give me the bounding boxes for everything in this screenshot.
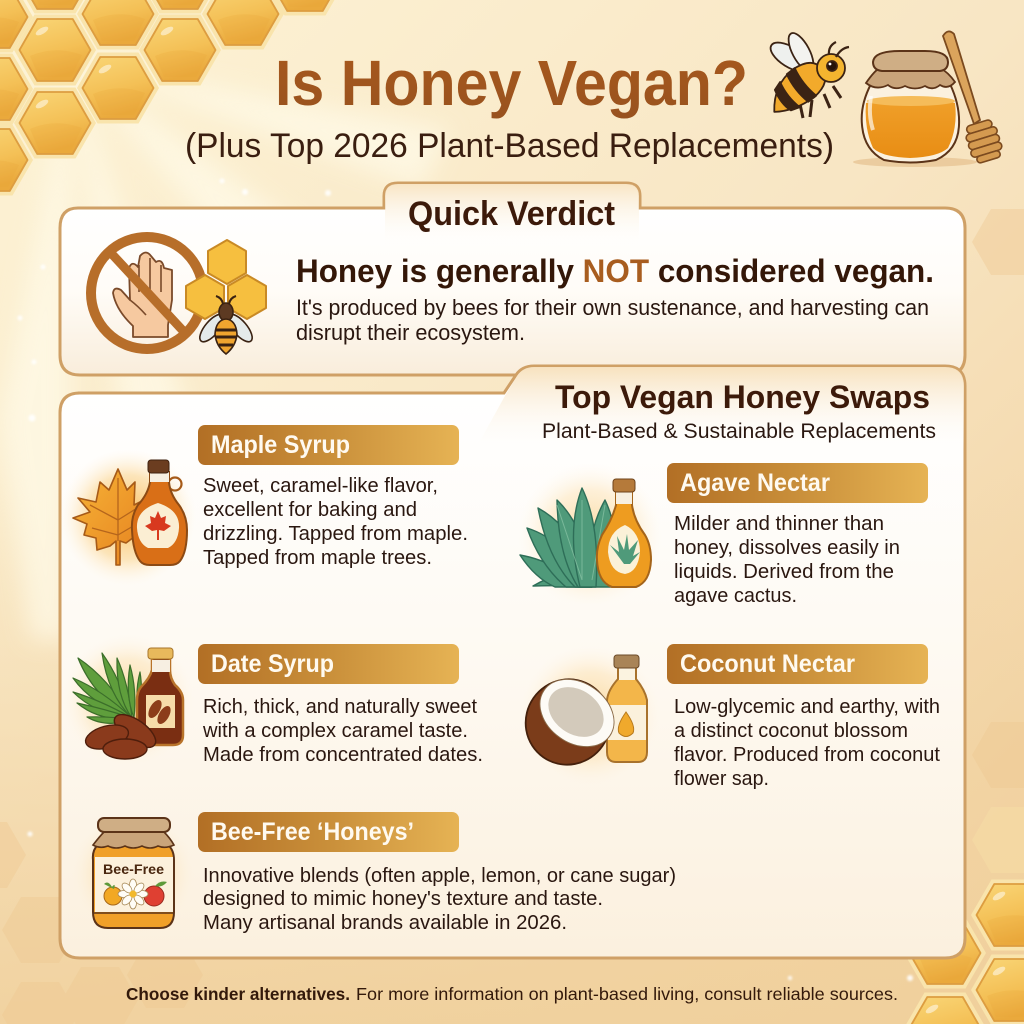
icon: honeycomb and bee — [186, 240, 266, 354]
heading: quick verdict: Quick Verdict — [408, 195, 615, 233]
footer: For more information on plant-based living, consult reliable sources. — [356, 984, 898, 1004]
label: date syrup — [198, 644, 459, 684]
text: maple syrup: Tapped from maple trees. — [203, 546, 432, 569]
title: Is Honey Vegan? — [275, 47, 748, 119]
text: agave nectar: honey, dissolves easily in — [674, 536, 900, 559]
label: coconut nectar — [667, 644, 928, 684]
item: maple syrup — [60, 425, 468, 585]
honeycomb: bottom-right — [904, 880, 1024, 1024]
item: bee-free honeys — [71, 811, 676, 935]
text: agave nectar — [674, 512, 900, 607]
item: coconut nectar — [509, 644, 940, 790]
text: maple syrup: drizzling. Tapped from maple. — [203, 522, 468, 545]
subtitle: (Plus Top 2026 Plant-Based Replacements) — [185, 127, 834, 165]
icon: coconut and bottle — [509, 645, 660, 785]
label: maple syrup — [198, 425, 459, 465]
label: bee-free honeys — [198, 812, 459, 852]
text: maple syrup — [203, 474, 468, 569]
text: agave nectar: liquids. Derived from the — [674, 560, 894, 583]
panel: top vegan honey swaps — [60, 366, 965, 958]
icon: flying bee — [761, 29, 849, 122]
footer: Choose kinder alternatives. — [126, 984, 350, 1004]
icon: maple leaf and bottle — [60, 449, 196, 585]
text: date syrup: Made from concentrated dates. — [203, 743, 483, 766]
verdict explanation: It's produced by bees for their own sustenance, and harvesting can — [296, 295, 929, 320]
text: date syrup: Rich, thick, and naturally sweet — [203, 695, 477, 718]
icon: dates and bottle — [62, 634, 194, 766]
jar label text: Bee-Free — [103, 861, 164, 877]
verdict statement: Honey is generally NOT considered vegan. — [296, 253, 934, 289]
icon: honey jar and dipper — [853, 31, 1005, 167]
text: maple syrup: excellent for baking and — [203, 498, 417, 521]
text: bee-free honeys: designed to mimic honey's texture and taste. — [203, 887, 603, 910]
verdict explanation: disrupt their ecosystem. — [296, 320, 525, 345]
honeycomb: top-left — [0, 0, 346, 196]
panel: quick verdict — [60, 183, 965, 375]
swaps subheading: Plant-Based & Sustainable Replacements — [542, 419, 936, 443]
text: bee-free honeys: Many artisanal brands available in 2026. — [203, 911, 567, 934]
icon: bee-free jar — [71, 811, 195, 935]
text: maple syrup: Sweet, caramel-like flavor, — [203, 474, 438, 497]
text: coconut nectar: Low-glycemic and earthy, with — [674, 695, 940, 718]
verdict tab shade — [385, 184, 639, 245]
icon: prohibited hand — [91, 237, 203, 349]
text: date syrup: with a complex caramel taste. — [202, 719, 468, 742]
label: bee-free honeys: Bee-Free ‘Honeys’ — [211, 818, 414, 846]
swaps tab shade — [475, 367, 964, 450]
text: agave nectar: Milder and thinner than — [674, 512, 884, 535]
text: agave nectar: agave cactus. — [674, 584, 797, 607]
text: coconut nectar: flower sap. — [674, 767, 769, 790]
icon: agave and bottle — [518, 463, 662, 607]
text: coconut nectar — [674, 695, 940, 790]
verdict explanation — [296, 295, 929, 345]
text: bee-free honeys — [203, 864, 676, 934]
label: agave nectar — [667, 463, 928, 503]
footer — [126, 984, 898, 1004]
text: date syrup — [202, 695, 483, 766]
label: maple syrup: Maple Syrup — [211, 431, 350, 459]
item: agave nectar — [518, 463, 928, 607]
text: bee-free honeys: Innovative blends (often apple, lemon, or cane sugar) — [203, 864, 676, 887]
text: coconut nectar: a distinct coconut blossom — [674, 719, 908, 742]
label: agave nectar: Agave Nectar — [680, 469, 830, 497]
label: coconut nectar: Coconut Nectar — [680, 650, 855, 678]
item: date syrup — [62, 634, 483, 766]
heading: swaps: Top Vegan Honey Swaps — [555, 379, 930, 415]
label: date syrup: Date Syrup — [211, 650, 334, 678]
text: coconut nectar: flavor. Produced from coconut — [674, 743, 940, 766]
